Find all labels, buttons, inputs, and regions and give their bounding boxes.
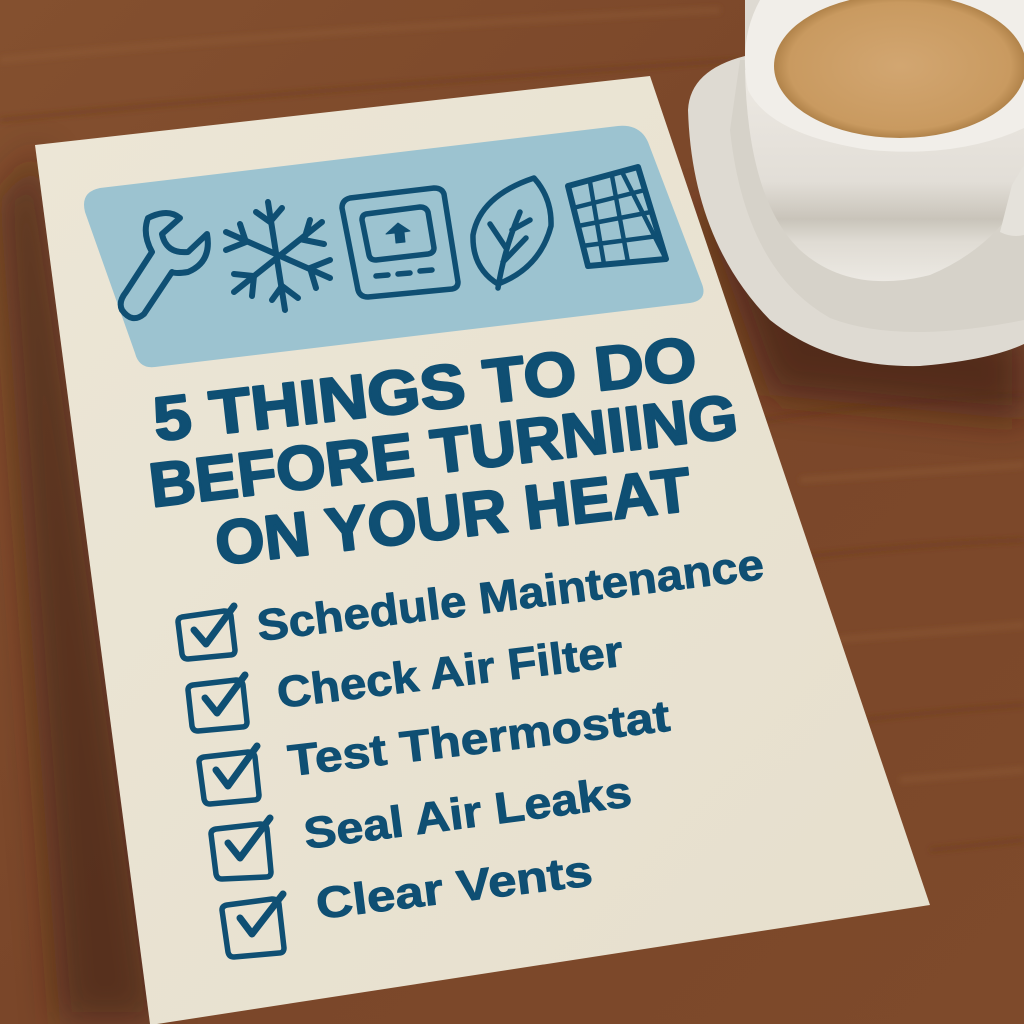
icon: leaf — [473, 178, 551, 288]
cup rim — [745, 0, 1024, 152]
cup body — [745, 60, 1024, 281]
item: seal air leaks — [211, 767, 634, 879]
icon: air filter grid — [568, 167, 666, 266]
panel: icon banner — [84, 126, 704, 367]
coffee surface — [774, 0, 1024, 138]
coffee cup and saucer — [688, 0, 1024, 366]
item: check air filter: Check Air Filter — [274, 627, 626, 718]
cup handle — [1000, 165, 1024, 236]
item: check air filter — [188, 627, 626, 731]
icon: wrench — [121, 213, 208, 318]
item: test thermostat — [199, 692, 673, 804]
checklist — [178, 540, 766, 957]
item: test thermostat: Test Thermostat — [285, 692, 673, 786]
title — [145, 325, 741, 579]
item: clear vents — [222, 846, 595, 957]
item: clear vents: Clear Vents — [313, 846, 595, 929]
title: ON YOUR HEAT — [212, 455, 695, 579]
icon: thermostat — [342, 188, 458, 297]
icon: snowflake — [226, 202, 330, 310]
title: BEFORE TURNIING — [145, 382, 741, 521]
item: seal air leaks: Seal Air Leaks — [301, 767, 634, 859]
title: 5 THINGS TO DO — [150, 325, 700, 455]
saucer — [688, 0, 1024, 366]
item: schedule maintenance: Schedule Maintenance — [254, 540, 766, 651]
